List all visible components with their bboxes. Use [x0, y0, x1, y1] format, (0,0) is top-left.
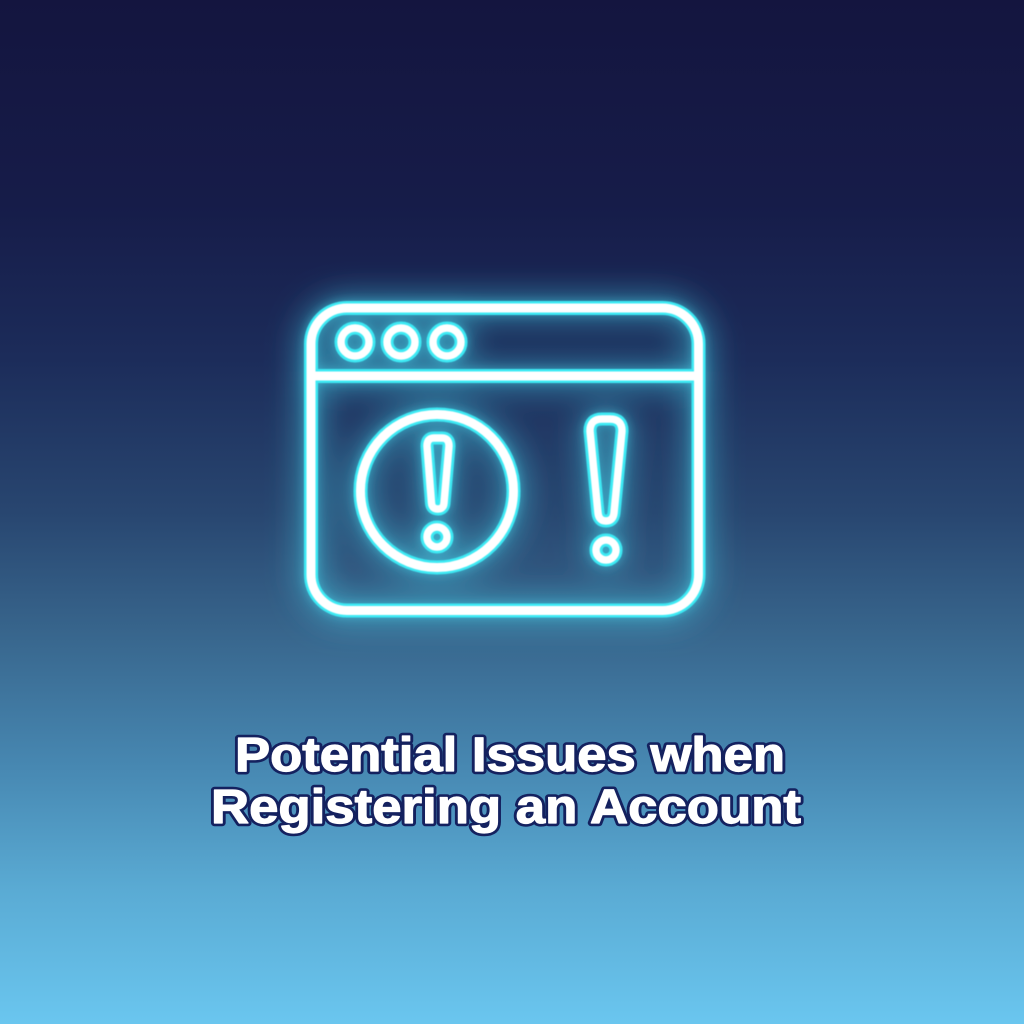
- title line 2: Registering an Account: [211, 781, 801, 834]
- title: [211, 729, 801, 834]
- icon: neon browser window with warning symbols: [311, 308, 698, 610]
- wide outer glow: [311, 308, 698, 610]
- title line 2: Registering an Account: [211, 781, 801, 834]
- title line 1: Potential Issues when: [235, 729, 785, 782]
- white tube core: [311, 308, 698, 610]
- title line 1: Potential Issues when: [235, 729, 785, 782]
- cyan tube edge: [311, 308, 698, 610]
- near glow: [311, 308, 698, 610]
